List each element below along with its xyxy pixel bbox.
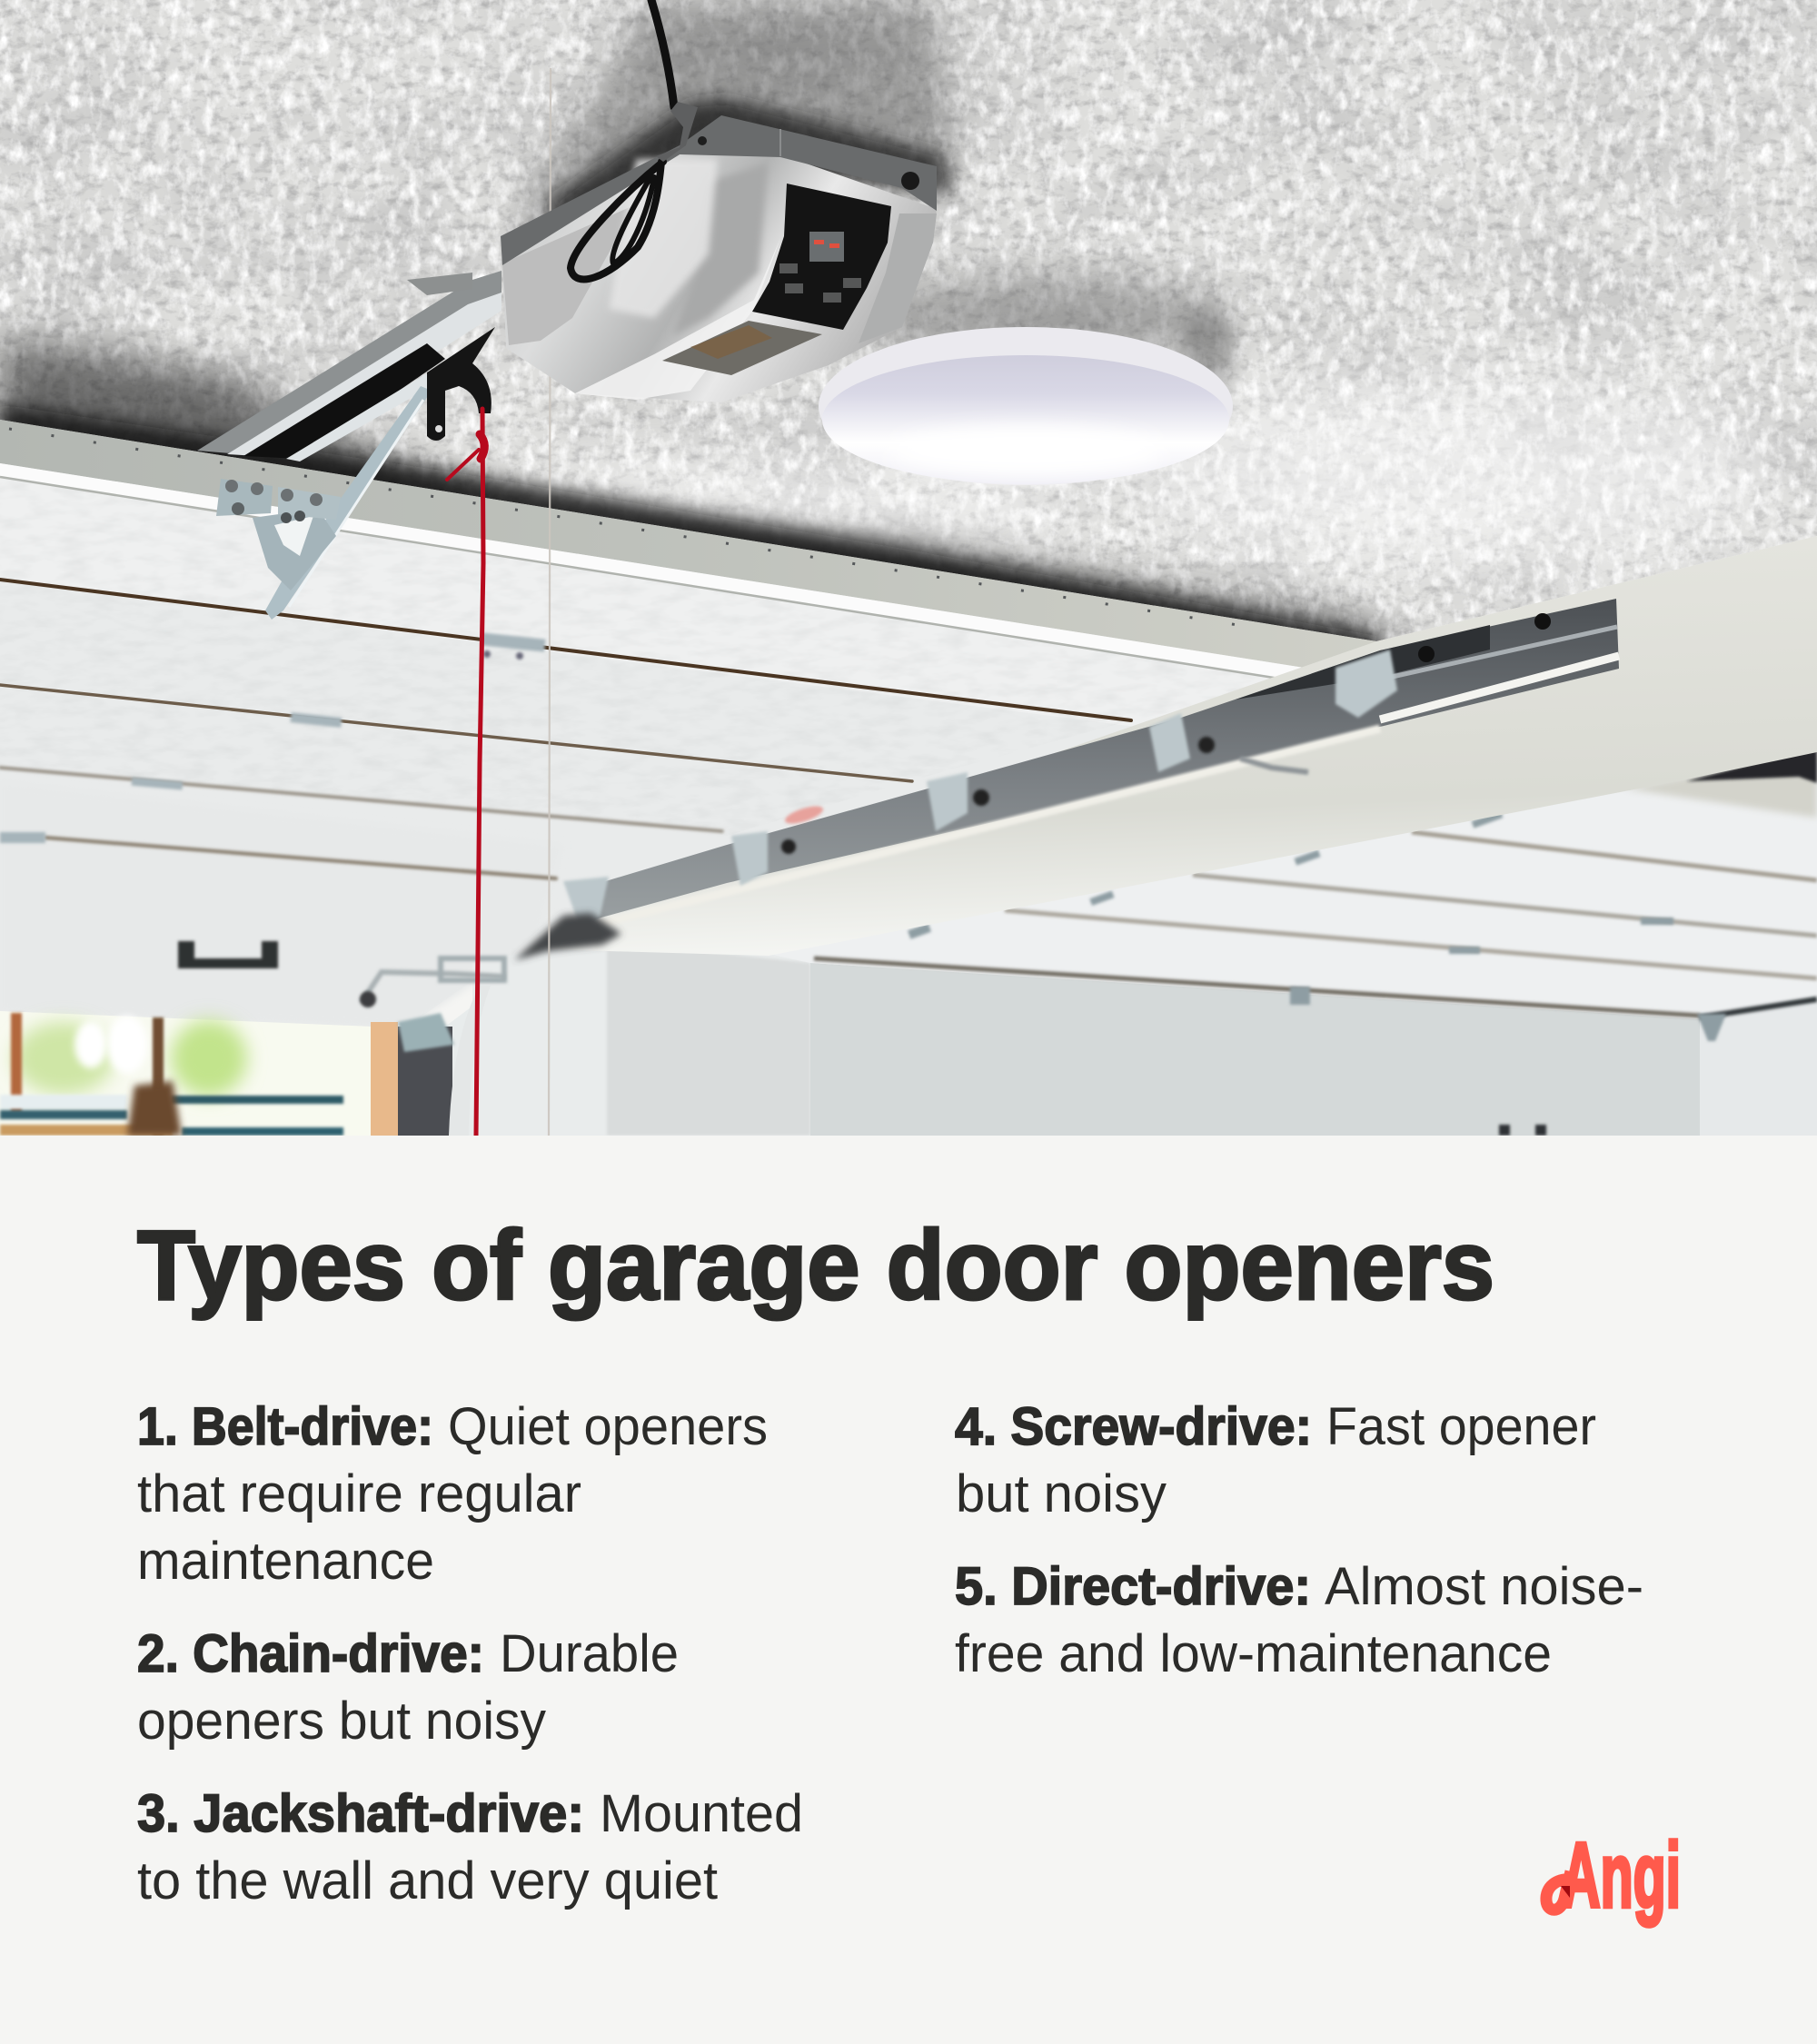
list item 4: screw-drive: Fast opener	[1326, 1397, 1596, 1456]
panel: white ceiling beam	[545, 536, 1817, 956]
photo detail: window view	[0, 986, 491, 1136]
icon: blurred floor object	[1499, 1125, 1546, 1136]
panel: header beam above door	[0, 420, 1376, 683]
logo: Angi: Angi	[1562, 1825, 1681, 1927]
opener housing	[502, 154, 937, 402]
line: right door seams	[814, 832, 1817, 1017]
icon: door bracket arm	[216, 386, 432, 620]
list item 4: screw-drive: but noisy	[956, 1464, 1167, 1523]
list item 2: chain-drive	[137, 1624, 679, 1751]
list item 3: jackshaft-drive: Mounted	[600, 1784, 803, 1843]
icon: track brackets	[563, 650, 1397, 931]
list item 5: direct-drive: Almost noise-	[1325, 1557, 1643, 1616]
panel: wall and right door	[472, 747, 1817, 1136]
list item 1: belt-drive: maintenance	[137, 1532, 434, 1591]
list item 5: direct-drive	[955, 1557, 1643, 1683]
opener power cable	[571, 0, 674, 279]
icon: ceiling light fixture	[819, 327, 1233, 485]
opener lens cover	[662, 321, 822, 375]
list item 5: direct-drive: free and low-maintenance	[955, 1624, 1552, 1683]
list item 2: chain-drive: 2. Chain-drive:	[137, 1624, 484, 1683]
list item 1: belt-drive: Quiet openers	[448, 1397, 768, 1456]
list item 4: screw-drive	[955, 1397, 1596, 1523]
photo: garage door opener on ceiling	[0, 0, 1817, 1136]
icon: opener motor unit	[501, 0, 937, 402]
list item 2: chain-drive: Durable	[500, 1624, 679, 1683]
icon: seam hinges	[0, 632, 546, 843]
list item 1: belt-drive: that require regular	[137, 1464, 581, 1523]
opener top band	[501, 115, 937, 265]
list item 4: screw-drive: 4. Screw-drive:	[955, 1397, 1312, 1456]
panel: textured ceiling	[0, 0, 1817, 641]
icon: right door brackets	[908, 810, 1726, 1041]
icon: thin safety string	[549, 68, 551, 1136]
icon: overhead rail to opener	[197, 271, 501, 461]
opener control panel	[752, 184, 891, 330]
logo: Angi	[1546, 1825, 1681, 1927]
list item 3: jackshaft-drive: to the wall and very quiet	[137, 1851, 718, 1910]
panel: left door sections	[0, 480, 1257, 1027]
list item 2: chain-drive: openers but noisy	[137, 1692, 546, 1751]
line: door seams	[0, 580, 1131, 878]
icon: red release cord	[447, 409, 484, 1136]
title: Types of garage door openers	[137, 1210, 1494, 1321]
panel: metal door track	[563, 599, 1619, 931]
opener cable strap	[656, 102, 698, 162]
list item 5: direct-drive: 5. Direct-drive:	[955, 1557, 1311, 1616]
icon: lower door hardware and dark return track	[178, 913, 621, 1136]
list item 3: jackshaft-drive	[137, 1784, 803, 1910]
list item 3: jackshaft-drive: 3. Jackshaft-drive:	[137, 1784, 584, 1843]
icon: black release hook	[427, 327, 495, 441]
list item 1: belt-drive	[137, 1397, 768, 1591]
list item 1: belt-drive: 1. Belt-drive:	[137, 1397, 433, 1456]
